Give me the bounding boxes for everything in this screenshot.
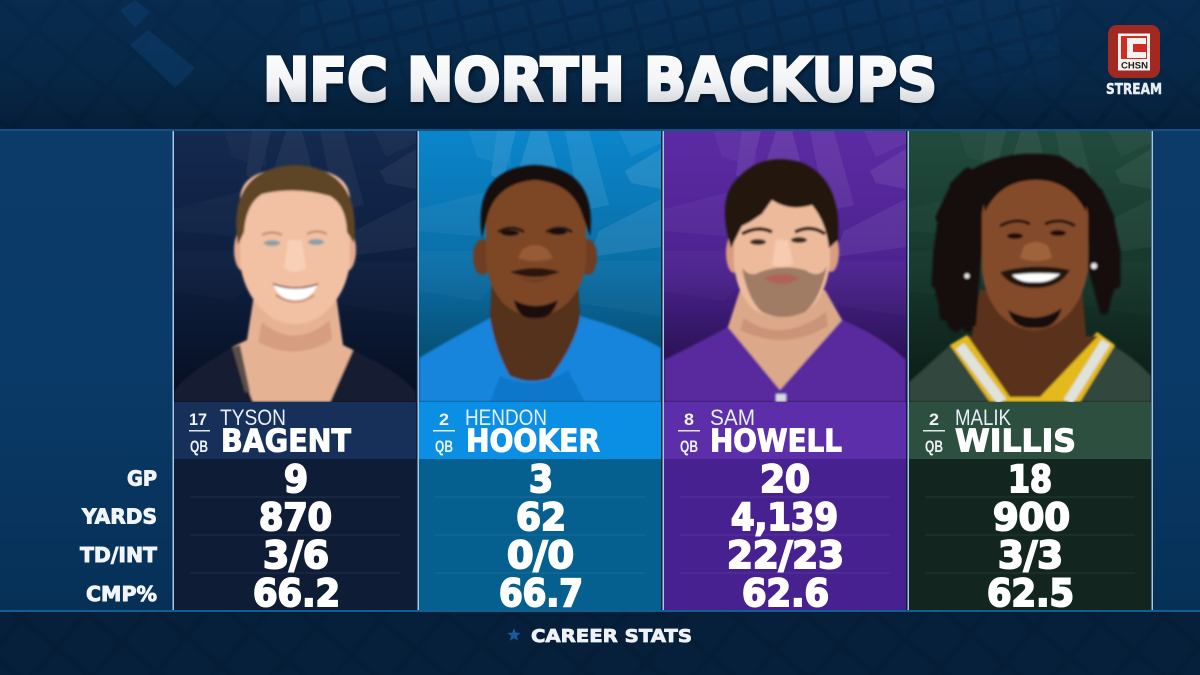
portrait: Bagent [174, 165, 416, 402]
jersey number: 8 [684, 410, 694, 429]
photo background [419, 131, 661, 402]
first name: TYSON [220, 405, 286, 430]
photo background [174, 131, 416, 402]
stat row labels: TD/INT [80, 543, 157, 567]
last name: HOWELL [710, 424, 842, 460]
background: map texture header band [0, 0, 1200, 94]
stat values: 62 [516, 496, 566, 539]
stats panel [909, 459, 1151, 610]
stat values: 20 [760, 458, 810, 501]
name bar [909, 402, 1151, 459]
stat values [727, 458, 844, 615]
jersey number: 17 [189, 410, 207, 429]
stat values [499, 458, 583, 615]
title: NFC NORTH BACKUPS [263, 46, 937, 116]
stat values [987, 458, 1074, 615]
stat values: 62.5 [987, 572, 1074, 615]
background fan [909, 131, 1151, 316]
stat values [253, 458, 340, 615]
stat values: 66.2 [253, 572, 340, 615]
jersey number: 2 [929, 410, 939, 429]
first name: HENDON [465, 405, 547, 430]
column: Tyson Bagent [174, 131, 416, 615]
background fan [174, 131, 416, 316]
background fan [664, 131, 906, 316]
stat row labels: CMP% [86, 582, 157, 606]
position: QB [435, 437, 453, 456]
stat values: 4,139 [731, 496, 838, 539]
last name: HOOKER [466, 424, 600, 460]
stat values: 3 [529, 458, 553, 501]
bottom rule [0, 610, 1200, 612]
first name: SAM [710, 405, 755, 430]
portrait: Howell [664, 159, 906, 402]
top rule [0, 129, 1200, 131]
column: Sam Howell [664, 131, 906, 615]
stat values: 66.7 [499, 572, 583, 615]
stat values: 3/6 [263, 534, 329, 577]
stat values: 18 [1008, 458, 1052, 501]
stat values: 870 [259, 496, 332, 539]
stat values: 3/3 [998, 534, 1063, 577]
stats panel [419, 459, 661, 610]
stat values: 0/0 [507, 534, 574, 577]
logo: CHSN stream: STREAM [1106, 80, 1162, 98]
last name: BAGENT [221, 424, 351, 460]
background fan [419, 131, 661, 316]
logo: CHSN stream: CHSN [1121, 60, 1148, 72]
name bar [664, 402, 906, 459]
icon: star [507, 628, 521, 641]
stat values: 22/23 [727, 534, 844, 577]
stat values: 9 [284, 458, 308, 501]
position: QB [680, 437, 698, 456]
position: QB [190, 437, 208, 456]
portrait: Willis [909, 154, 1151, 402]
photo background [909, 131, 1151, 402]
column: Malik Willis [909, 131, 1151, 615]
portrait: Hooker [419, 165, 661, 402]
stat row labels: GP [127, 466, 157, 490]
position: QB [925, 437, 943, 456]
name bar [174, 402, 416, 459]
photo background [664, 131, 906, 402]
stats panel [174, 459, 416, 610]
stat values: 62.6 [742, 572, 829, 615]
side panel: left stat label column [0, 131, 173, 611]
first name: MALIK [955, 405, 1011, 430]
name bar [419, 402, 661, 459]
logo: CHSN stream [1106, 25, 1162, 98]
stats panel [664, 459, 906, 610]
stat row labels [80, 466, 157, 606]
column: Hendon Hooker [419, 131, 661, 615]
stat row labels: YARDS [81, 504, 157, 528]
side panel: right edge [1153, 131, 1200, 611]
jersey number: 2 [439, 410, 449, 429]
last name: WILLIS [955, 424, 1076, 460]
footnote: career stats: CAREER STATS [531, 626, 692, 647]
stat values: 900 [993, 496, 1070, 539]
